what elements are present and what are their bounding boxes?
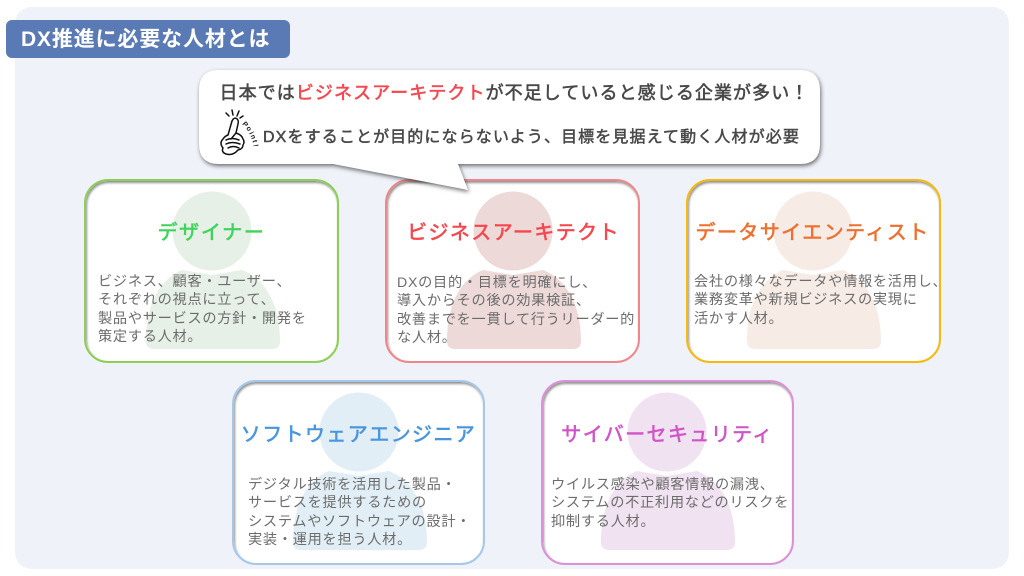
callout subtext: DXをすることが目的にならないよう、目標を見据えて動く人材が必要 xyxy=(263,129,800,146)
description: システムやソフトウェアの設計・ xyxy=(248,514,471,530)
description: サービスを提供するための xyxy=(248,495,427,511)
icon: pointing hand: P xyxy=(240,121,249,129)
heading: ソフトウェアエンジニア xyxy=(241,424,476,446)
panel: data scientist xyxy=(686,179,941,363)
description: ウイルス感染や顧客情報の漏洩、 xyxy=(551,477,775,493)
description xyxy=(98,274,307,345)
description: 製品やサービスの方針・開発を xyxy=(98,311,307,327)
description: 抑制する人材。 xyxy=(551,514,655,530)
panel: software engineer xyxy=(232,380,485,565)
heading: ビジネスアーキテクト xyxy=(407,222,620,244)
description: 実装・運用を担う人材。 xyxy=(248,532,412,548)
heading: デザイナー xyxy=(157,222,266,244)
description xyxy=(694,274,947,327)
panel: cyber security xyxy=(541,380,794,565)
icon: person xyxy=(447,192,581,349)
description: DXの目的・目標を明確にし、 xyxy=(397,275,597,291)
description: デジタル技術を活用した製品・ xyxy=(248,477,456,493)
icon: person xyxy=(601,392,735,550)
description: 改善までを一貫して行うリーダー的 xyxy=(397,312,635,328)
icon: pointing hand: o xyxy=(244,125,253,133)
title: DX推進に必要な人材とは xyxy=(21,28,270,51)
description: 策定する人材。 xyxy=(98,329,202,345)
panel: designer xyxy=(84,179,339,363)
description: システムの不正利用などのリスクを xyxy=(551,495,789,511)
description: それぞれの視点に立って、 xyxy=(98,292,275,308)
speech bubble xyxy=(197,69,824,194)
icon: pointing hand: t xyxy=(251,139,258,144)
description: 活かす人材。 xyxy=(694,311,783,327)
icon: pointing hand: n xyxy=(249,134,257,140)
icon: pointing hand: i xyxy=(247,131,254,136)
description xyxy=(248,476,471,548)
icon: person xyxy=(747,192,881,349)
description: 会社の様々なデータや情報を活用し、 xyxy=(694,274,947,290)
panel: business architect xyxy=(385,179,640,363)
description: な人材。 xyxy=(397,330,457,346)
description: ビジネス、顧客・ユーザー、 xyxy=(98,274,291,290)
icon: person xyxy=(146,192,280,349)
icon: pointing hand xyxy=(220,109,259,156)
description xyxy=(551,476,789,530)
icon: person xyxy=(293,392,427,550)
callout xyxy=(197,69,824,194)
title xyxy=(6,20,290,58)
heading: データサイエンティスト xyxy=(696,222,930,244)
icon: pointing hand: ! xyxy=(252,144,259,147)
description: 導入からその後の効果検証、 xyxy=(397,293,591,309)
description: 業務変革や新規ビジネスの実現に xyxy=(694,292,918,308)
description xyxy=(397,274,635,346)
heading: サイバーセキュリティ xyxy=(561,424,774,446)
callout headline: 日本ではビジネスアーキテクトが不足していると感じる企業が多い！ xyxy=(220,83,809,103)
